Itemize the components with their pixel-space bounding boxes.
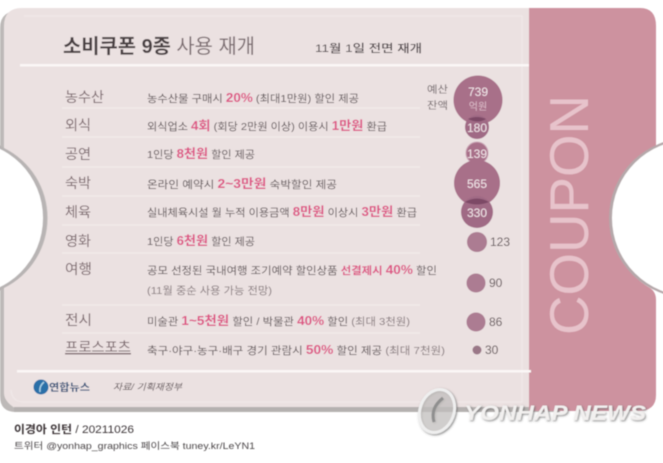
category labels: 외식 xyxy=(65,117,91,133)
bubble chart: budget balance: 330 xyxy=(467,206,487,220)
panel: ticket body xyxy=(4,8,530,408)
ticket shadow xyxy=(0,10,560,412)
category labels: 공연 xyxy=(65,146,91,162)
body bottom trim xyxy=(14,407,530,412)
watermark: Yonhap News xyxy=(414,385,646,437)
category labels: 여행 xyxy=(65,261,92,277)
source: 자료/ 기획재정부 xyxy=(113,382,183,392)
bubble chart: budget balance: 565 xyxy=(467,177,487,191)
benefit descriptions: (11월 중순 사용 가능 전망) xyxy=(147,285,272,297)
category labels: 체육 xyxy=(65,204,91,220)
category labels xyxy=(65,89,131,355)
COUPON vertical label: COUPON xyxy=(538,95,600,335)
row dividers xyxy=(62,108,420,333)
category labels: 전시 xyxy=(65,312,92,328)
benefit descriptions: 1인당 6천원 할인 제공 xyxy=(147,234,255,248)
benefit descriptions: 외식업소 4회 (회당 2만원 이상) 이용시 1만원 환급 xyxy=(147,119,387,133)
panel: coupon stub xyxy=(528,7,657,412)
footer rule xyxy=(17,370,531,372)
category labels: 농수산 xyxy=(65,89,104,105)
notch: right cut-out xyxy=(609,138,663,298)
subtitle: date: 11월 1일 전면 재개 xyxy=(315,41,422,55)
benefit descriptions: 축구·야구·농구·배구 경기 관람시 50% 할인 제공 (최대 7천원) xyxy=(147,343,445,357)
bubble chart: budget balance: 123 xyxy=(490,235,510,249)
logo: Yonhap News: 연합뉴스 xyxy=(49,381,90,394)
category labels: 영화 xyxy=(65,233,91,249)
notch rim: left xyxy=(0,138,46,298)
logo: Yonhap News xyxy=(34,380,90,394)
inner border xyxy=(11,16,522,402)
benefit descriptions: 실내체육시설 월 누적 이용금액 8만원 이상시 3만원 환급 xyxy=(147,205,417,219)
legend: budget remaining xyxy=(427,84,448,112)
legend: budget remaining: 잔액 xyxy=(427,100,448,112)
bubble chart: budget balance: 90 xyxy=(489,276,503,290)
byline: 이경아 인턴 / 20211026 xyxy=(14,423,134,436)
bubble chart: budget balance: 86 xyxy=(489,315,503,329)
bubble chart: budget balance: 139 xyxy=(467,147,487,161)
benefit descriptions: 공모 선정된 국내여행 조기예약 할인상품 선결제시 40% 할인 xyxy=(147,263,437,277)
category labels: 숙박 xyxy=(65,175,91,191)
benefit descriptions: 농수산물 구매시 20% (최대1만원) 할인 제공 xyxy=(147,91,359,105)
title: 소비쿠폰 9종 사용 재개 xyxy=(63,35,255,58)
watermark: Yonhap News: YONHAP NEWS xyxy=(464,402,646,425)
bubble chart: budget balance: 180 xyxy=(467,121,487,135)
benefit descriptions: 미술관 1~5천원 할인 / 박물관 40% 할인 (최대 3천원) xyxy=(147,314,410,328)
category labels: 프로스포츠 xyxy=(65,339,131,355)
notch: left cut-out xyxy=(0,141,43,295)
social links: 트위터 @yonhap_graphics 페이스북 tuney.kr/LeYN1 xyxy=(14,441,255,451)
benefit descriptions: 1인당 8천원 할인 제공 xyxy=(147,147,255,161)
bubble chart: budget balance: 739 xyxy=(468,85,488,99)
header rule xyxy=(20,64,529,66)
benefit descriptions xyxy=(147,91,445,357)
bubble chart: budget balance: 억원 xyxy=(469,101,487,113)
bubble chart: budget balance: 30 xyxy=(485,343,499,357)
benefit descriptions: 온라인 예약시 2~3만원 숙박할인 제공 xyxy=(147,177,337,191)
legend: budget remaining: 예산 xyxy=(427,84,448,96)
bubble chart: budget balance xyxy=(454,76,510,357)
